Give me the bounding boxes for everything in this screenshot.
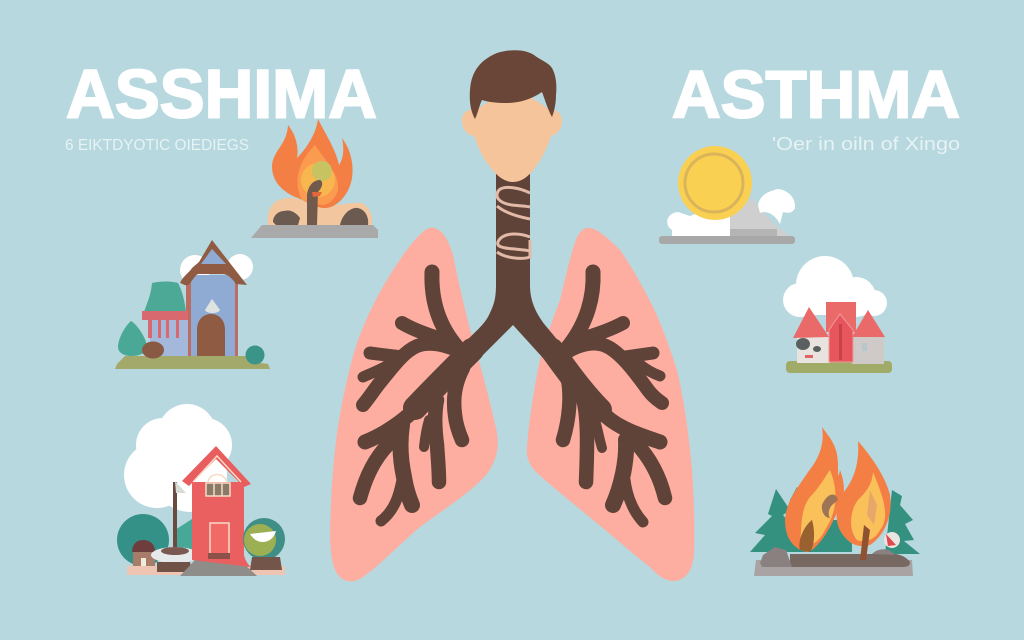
- flame left: [785, 427, 844, 552]
- left lung: [330, 228, 498, 581]
- mushroom hut: [133, 550, 155, 566]
- ground: [754, 560, 913, 576]
- icon: forest fire lower right: [750, 427, 920, 576]
- left bronchial tree: [360, 272, 472, 521]
- title: left: ASSHIMA: [66, 56, 377, 132]
- round bush: [243, 518, 285, 560]
- trachea rings: [497, 187, 530, 258]
- pole with flag: [173, 482, 177, 550]
- pot: [151, 547, 199, 563]
- icon: red cottage right: [783, 256, 892, 373]
- porch: [150, 320, 188, 356]
- airways: trachea and bronchi: [360, 170, 665, 522]
- trachea: [462, 170, 560, 358]
- bushes: [118, 321, 147, 356]
- house body: [192, 482, 251, 567]
- ground: [127, 566, 285, 575]
- subtitle: right: 'Oer in oiln of Xingo: [772, 134, 960, 154]
- right lung: [527, 228, 694, 581]
- window: [205, 299, 220, 313]
- icon: campfire top left: [251, 119, 378, 238]
- tower: [826, 302, 856, 332]
- tower: [188, 275, 238, 356]
- log: [307, 180, 322, 225]
- icon: blue house left: [115, 240, 270, 369]
- cloud: [124, 404, 232, 512]
- road: [180, 560, 257, 576]
- roof: [180, 240, 247, 285]
- sun: [678, 146, 752, 220]
- log: [860, 525, 870, 560]
- rocks: [273, 211, 300, 225]
- cloud: [783, 256, 887, 317]
- head and face: [462, 50, 562, 182]
- door: [210, 523, 229, 557]
- platform: [251, 225, 378, 238]
- mountain: [730, 198, 788, 237]
- trees: [750, 489, 800, 552]
- ground: [659, 236, 795, 244]
- icon: red house lower left: [117, 404, 285, 576]
- hair: [470, 50, 556, 119]
- ground: [115, 356, 270, 369]
- door: [197, 314, 225, 356]
- flame right: [837, 441, 891, 546]
- trees: [117, 514, 169, 566]
- window: [206, 483, 230, 496]
- ground: [786, 361, 892, 373]
- right bronchial tree: [552, 272, 665, 522]
- title: right: ASTHMA: [672, 58, 960, 132]
- roofs: [793, 307, 829, 338]
- subtitle: left: 6 EIKTDYOTIC OIEDIEGS: [65, 137, 249, 154]
- walls: [797, 337, 830, 363]
- clouds: [667, 212, 730, 236]
- spots: [796, 338, 810, 350]
- ball: [884, 532, 900, 548]
- icon: sun over clouds top right: [659, 146, 795, 244]
